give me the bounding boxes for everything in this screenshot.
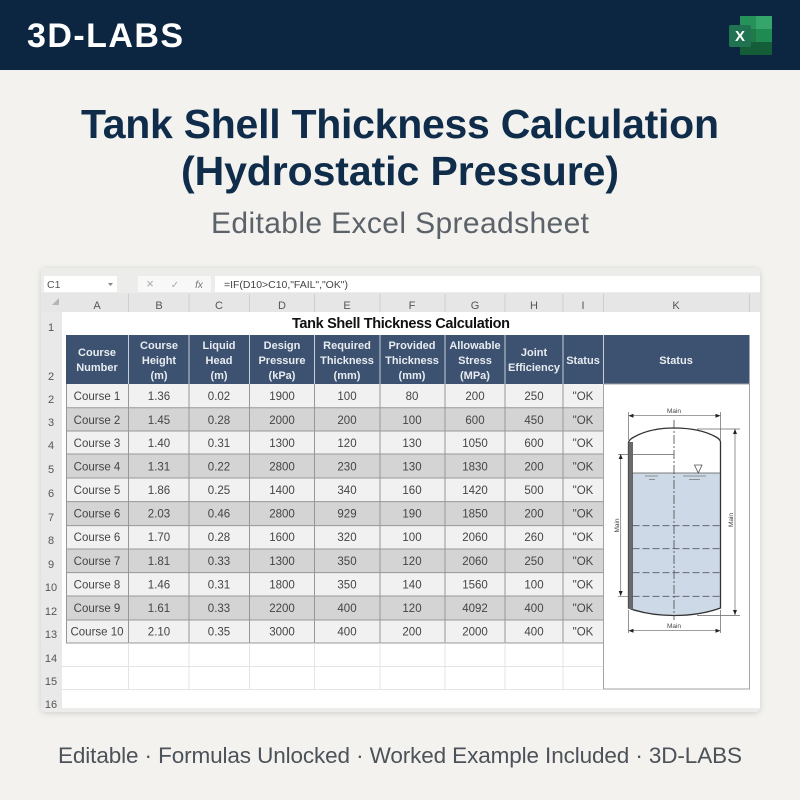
row: course 3: 120 [337,438,357,450]
row: course 2: 100 [402,415,422,427]
tank outline [628,428,720,616]
row: course 4: 1830 [462,462,488,474]
row: course 4: 130 [402,462,422,474]
row header column: 7 [48,512,54,524]
row: course 3: 0.31 [208,438,230,450]
row: course 1: 1900 [269,391,295,403]
column header row: I [581,300,585,312]
panel: tank diagram: Main [728,513,735,527]
row: course 3 [74,438,594,450]
row header column: 9 [48,559,54,571]
row header column: 2 [48,394,54,406]
row header column: 13 [45,629,57,641]
row: course 7: 250 [524,556,544,568]
row: course 1: 1.36 [148,391,170,403]
row: course 5: 160 [402,485,422,497]
row: course 2: 0.28 [208,415,230,427]
table header row: Required [323,340,371,352]
row: course 5: 1400 [269,485,295,497]
row: course 1: Course 1 [74,391,120,403]
row header column: 16 [45,699,57,711]
row: course 6 repeat: 100 [402,532,422,544]
table header row: (m) [150,370,168,382]
row: course 7 [74,556,594,568]
row header column [41,312,62,711]
row header column: 2 [48,371,54,383]
row: course 5: 0.25 [208,485,230,497]
row: course 2: "OK [573,415,594,427]
row: course 10 [70,626,594,638]
table header row: Allowable [449,340,501,352]
row: course 2: 450 [524,415,544,427]
row: course 10: 2.10 [148,626,170,638]
table header row: Provided [388,340,436,352]
row: course 6 repeat: 2060 [462,532,488,544]
row: course 9: 120 [402,603,422,615]
row: course 7: 1.81 [148,556,170,568]
row: course 10: 400 [337,626,357,638]
table header row: Stress [458,355,492,367]
table header row: (mm) [399,370,426,382]
panel: tank diagram [604,384,750,689]
row: course 6: Course 6 [74,508,120,520]
row: course 9: "OK [573,603,594,615]
row: course 5: Course 5 [74,485,120,497]
row header column: 4 [48,440,54,452]
row: course 7: 0.33 [208,556,230,568]
table header row: Design [264,340,301,352]
formula bar: =IF(D10>C10,"FAIL","OK") [224,279,348,291]
row: course 8: 1.46 [148,580,170,592]
centerline and course dashes [673,420,675,620]
column header row: H [530,300,538,312]
row: course 1: 250 [524,391,544,403]
column header row: C [215,300,223,312]
row: course 5: 500 [524,485,544,497]
row: course 6 repeat: 320 [337,532,357,544]
table header row: Joint [521,347,547,359]
table header row: Liquid [202,340,236,352]
row: course 3: 1.40 [148,438,170,450]
sheet area [62,312,760,708]
row: course 5 [74,485,594,497]
row: course 6: 1850 [462,508,488,520]
hatched shell wall [628,442,632,609]
table header row: Status [566,355,600,367]
sheet title: Tank Shell Thickness Calculation [292,316,510,332]
row header column: 15 [45,676,57,688]
title [81,101,719,194]
liquid fill [632,473,720,616]
row: course 10: "OK [573,626,594,638]
row: course 10: Course 10 [70,626,124,638]
row: course 1: 100 [337,391,357,403]
top header band [0,0,800,70]
row header column: 8 [48,535,54,547]
table header row: Thickness [320,355,374,367]
row: course 9: 0.33 [208,603,230,615]
row: course 5: 1.86 [148,485,170,497]
row: course 4: 230 [337,462,357,474]
row: course 6 repeat: 0.28 [208,532,230,544]
row: course 1: "OK [573,391,594,403]
table header row: Thickness [385,355,439,367]
row: course 8: 100 [524,580,544,592]
row: course 6 repeat: "OK [573,532,594,544]
column header row: E [343,300,351,312]
row: course 7: Course 7 [74,556,120,568]
panel: tank diagram: Main [667,623,681,630]
table header row: Height [142,355,176,367]
row: course 7: 2060 [462,556,488,568]
row: course 6: 2800 [269,508,295,520]
table header row: (mm) [334,370,361,382]
column header row: B [155,300,163,312]
column header row [41,293,760,312]
row header column: 1 [48,322,54,334]
row: course 5: "OK [573,485,594,497]
table header row: Efficiency [508,362,561,374]
table header row [66,335,750,384]
row: course 10: 200 [402,626,422,638]
row: course 6: 0.46 [208,508,230,520]
table header row: Course [78,347,116,359]
column header row: F [409,300,416,312]
row: course 6: 2.03 [148,508,170,520]
row: course 9 [74,603,594,615]
row: course 9: 4092 [462,603,488,615]
footer tagline: Editable · Formulas Unlocked · Worked Example Included · 3D-LABS [58,743,742,768]
row: course 6 repeat: 1600 [269,532,295,544]
row: course 10: 3000 [269,626,295,638]
row header column: 6 [48,488,54,500]
table header row: (kPa) [269,370,296,382]
table header row: Pressure [258,355,306,367]
formula bar: C1 [47,279,61,291]
row header column: 3 [48,417,54,429]
row: course 6 repeat: 1.70 [148,532,170,544]
row: course 8: 1800 [269,580,295,592]
row: course 6 repeat: 260 [524,532,544,544]
icon: Excel logo: X [735,28,745,45]
row: course 8: 0.31 [208,580,230,592]
column header row: G [471,300,479,312]
formula bar: × [146,276,154,291]
row: course 8: "OK [573,580,594,592]
row: course 9: 400 [337,603,357,615]
row: course 1: 80 [406,391,418,403]
column header row: D [278,300,286,312]
panel: spreadsheet window [41,268,760,712]
row: course 6: 929 [337,508,357,520]
column header row: A [93,300,101,312]
row header column: 5 [48,464,54,476]
row: course 8: 350 [337,580,357,592]
row: course 6 [74,508,594,520]
row: course 5: 1420 [462,485,488,497]
row: course 4: "OK [573,462,594,474]
row: course 7: 1300 [269,556,295,568]
title: (Hydrostatic Pressure) [181,148,619,194]
row: course 7: 350 [337,556,357,568]
table header row: (m) [210,370,228,382]
row: course 8: Course 8 [74,580,120,592]
row: course 5: 340 [337,485,357,497]
table header row: Status [659,355,693,367]
row: course 2 [74,415,594,427]
row: course 4: 0.22 [208,462,230,474]
row: course 1: 200 [465,391,485,403]
row: course 6: 200 [524,508,544,520]
row header column: 10 [45,582,57,594]
row: course 2: 1.45 [148,415,170,427]
table header row: Head [206,355,232,367]
row: course 10: 2000 [462,626,488,638]
row: course 1 [74,391,594,403]
row: course 4: 2800 [269,462,295,474]
row: course 6: 190 [402,508,422,520]
row: course 8: 140 [402,580,422,592]
brand logo text: 3D-LABS [27,17,183,55]
row: course 7: 120 [402,556,422,568]
row header column: 14 [45,653,57,665]
panel: tank diagram: Main [614,518,621,533]
dimension labels: Main [667,408,681,415]
row: course 2: Course 2 [74,415,120,427]
row: course 10: 400 [524,626,544,638]
dimension lines [618,412,740,633]
table header row: (MPa) [460,370,490,382]
icon: Excel logo [729,16,772,55]
row: course 2: 2000 [269,415,295,427]
row: course 7: "OK [573,556,594,568]
row: course 8 [74,580,594,592]
row: course 4 [74,462,594,474]
liquid level marker [694,465,702,473]
row: course 2: 200 [337,415,357,427]
row: course 9: 1.61 [148,603,170,615]
row: course 2: 600 [465,415,485,427]
row: course 3: "OK [573,438,594,450]
row: course 4: 200 [524,462,544,474]
row: course 4: Course 4 [74,462,121,474]
row: course 8: 1560 [462,580,488,592]
row: course 3: 130 [402,438,422,450]
table header row: Course [140,340,178,352]
subtitle: Editable Excel Spreadsheet [211,207,590,240]
data table rows [66,384,604,643]
row: course 9: Course 9 [74,603,120,615]
table header row: Number [76,362,118,374]
formula bar: fx [195,280,204,291]
row: course 6 repeat: Course 6 [74,532,120,544]
row: course 9: 400 [524,603,544,615]
column header row: K [672,300,680,312]
row: course 4: 1.31 [148,462,170,474]
row: course 6: "OK [573,508,594,520]
title: Tank Shell Thickness Calculation [81,101,719,147]
row header column: 12 [45,606,57,618]
row: course 3: 600 [524,438,544,450]
row: course 3: 1050 [462,438,488,450]
row: course 1: 0.02 [208,391,230,403]
row: course 6 repeat [74,532,594,544]
row: course 9: 2200 [269,603,295,615]
row: course 3: 1300 [269,438,295,450]
formula bar: ✓ [171,280,179,291]
row: course 3: Course 3 [74,438,120,450]
row: course 10: 0.35 [208,626,230,638]
formula bar [44,276,760,292]
